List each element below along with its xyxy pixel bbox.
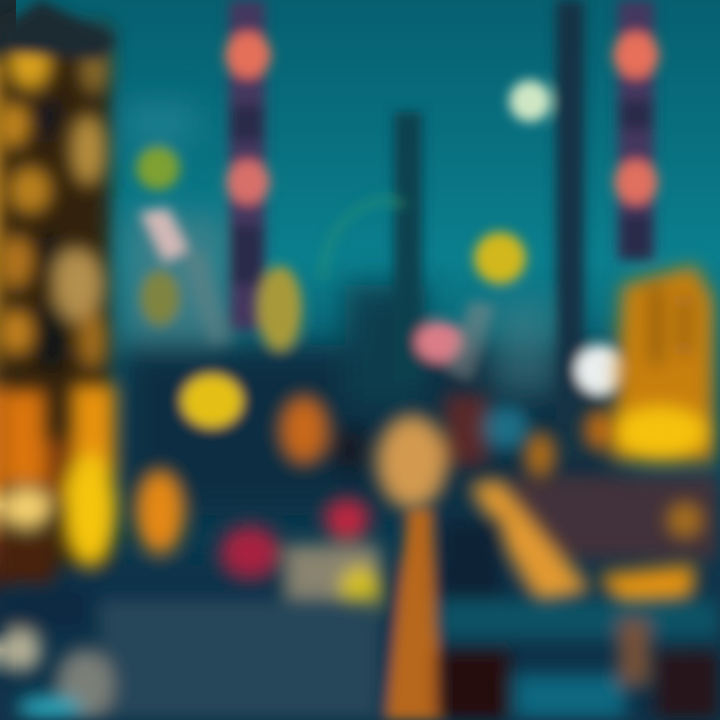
stack dark bands xyxy=(231,105,263,285)
orange post xyxy=(620,620,648,685)
olive lantern xyxy=(258,266,302,350)
stack dark bands xyxy=(620,100,652,260)
dark red base xyxy=(440,650,510,720)
cyan corner xyxy=(18,696,82,720)
left edge backing strip xyxy=(0,0,16,720)
stack pink lights xyxy=(225,32,271,204)
central lit structures xyxy=(136,395,529,618)
left tower xyxy=(0,0,118,585)
green lantern xyxy=(136,146,180,190)
dark left ground xyxy=(0,590,90,630)
yellow strip xyxy=(600,565,695,612)
stack xyxy=(229,0,265,330)
orange glow xyxy=(526,433,554,477)
teal band xyxy=(440,600,720,638)
pale diagonal pipe right xyxy=(445,300,495,380)
tan tower xyxy=(378,416,446,508)
bottom water and foreground xyxy=(0,520,720,720)
building body xyxy=(612,265,714,462)
red spot xyxy=(325,500,369,540)
right lower complex xyxy=(470,410,720,612)
dark central panel xyxy=(440,520,500,610)
green arc ring xyxy=(322,201,405,280)
yellow lantern left xyxy=(182,375,242,427)
right orange building xyxy=(612,265,714,462)
tower roof xyxy=(0,0,118,60)
building windows xyxy=(650,285,690,365)
thin dark tower xyxy=(394,112,422,382)
stack pink lights xyxy=(613,32,659,204)
colored lanterns xyxy=(136,146,624,427)
teal pool xyxy=(515,675,625,720)
tower body xyxy=(0,25,110,565)
yellow lantern right xyxy=(474,232,526,284)
white lantern xyxy=(576,346,624,394)
moon xyxy=(509,80,551,122)
dark round xyxy=(332,428,368,472)
orange block left xyxy=(136,470,184,554)
slate left ground xyxy=(100,600,380,720)
pale diagonal pipe left xyxy=(180,250,232,345)
pink and white lantern xyxy=(140,208,188,262)
maroon block xyxy=(445,395,487,465)
orange window xyxy=(280,396,328,464)
chimney dark centre right xyxy=(556,0,584,460)
small orange glow xyxy=(667,502,703,538)
red block xyxy=(220,526,280,578)
stack xyxy=(618,0,654,260)
pink lantern xyxy=(416,322,464,362)
pale gold lantern xyxy=(140,270,180,326)
pale left spot xyxy=(0,630,40,670)
dark right base xyxy=(655,650,720,720)
maroon roof xyxy=(510,475,720,560)
chimney right xyxy=(613,0,659,260)
yellow spot xyxy=(340,566,380,618)
orange road xyxy=(386,510,442,720)
tower glowing base xyxy=(0,385,116,585)
chimney left xyxy=(225,0,271,330)
tower lit windows xyxy=(0,34,108,370)
tan left spot xyxy=(57,650,113,720)
orange diagonal xyxy=(470,480,590,605)
blue round xyxy=(485,406,529,450)
building bright base xyxy=(612,406,708,458)
grey block xyxy=(285,545,380,610)
